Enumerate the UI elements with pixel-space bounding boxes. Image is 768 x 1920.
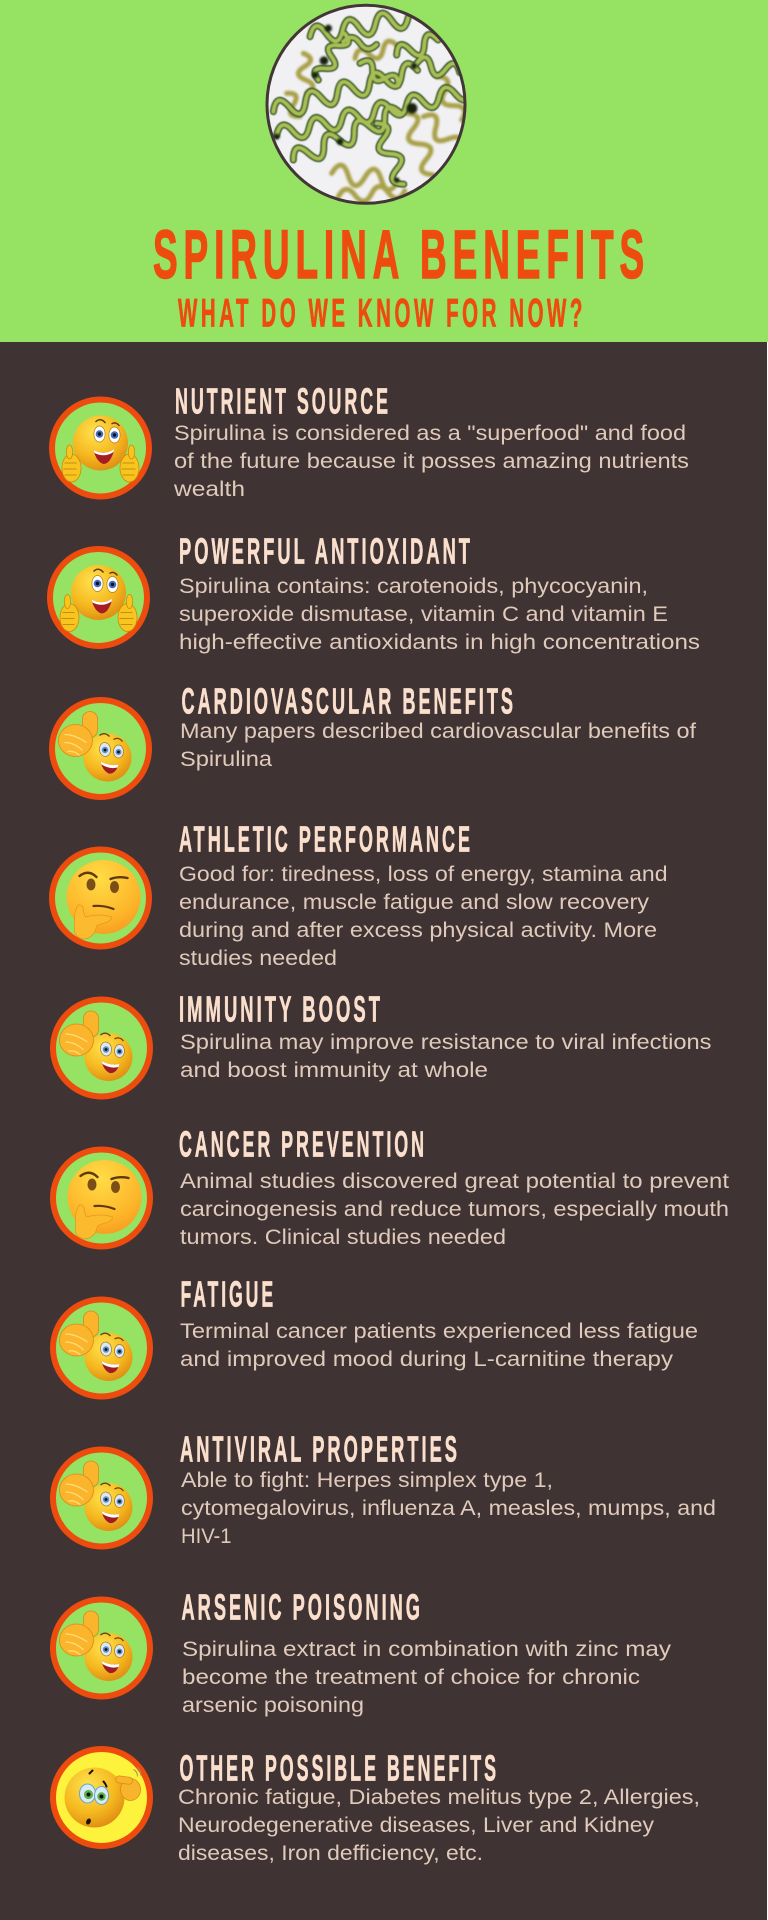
icon: thumb up emoji: [53, 1600, 150, 1696]
text block: [178, 1786, 700, 1865]
text block: [179, 575, 700, 654]
text block: Animal studies discovered great potential to prevent: [180, 1170, 729, 1193]
text block: endurance, muscle fatigue and slow recovery: [179, 891, 650, 914]
benefit: immunity boost: [53, 989, 712, 1096]
text block: [181, 1469, 716, 1548]
benefit: fatigue: [53, 1274, 698, 1396]
text block: Terminal cancer patients experienced less fatigue: [180, 1320, 698, 1343]
text block: [180, 1031, 712, 1082]
benefit: cancer prevention: [53, 1124, 729, 1249]
benefit: other possible benefits: [53, 1748, 700, 1865]
text block: cytomegalovirus, influenza A, measles, mumps, and: [181, 1497, 716, 1520]
heading: IMMUNITY BOOST: [179, 989, 383, 1030]
benefit: powerful antioxidant: [50, 531, 700, 654]
text block: [182, 1638, 672, 1717]
benefit: nutrient source: NUTRIENT SOURCE: [175, 381, 391, 422]
benefit: fatigue: FATIGUE: [180, 1274, 276, 1315]
text block: and boost immunity at whole: [180, 1059, 488, 1082]
icon: two thumbs up emoji: [52, 400, 149, 496]
text block: Able to fight: Herpes simplex type 1,: [181, 1469, 553, 1492]
benefit: athletic performance: ATHLETIC PERFORMANCE: [179, 819, 473, 860]
text block: of the future because it posses amazing nutrients: [174, 450, 689, 473]
text block: become the treatment of choice for chronic: [182, 1666, 640, 1689]
text block: HIV-1: [181, 1525, 232, 1548]
text block: Neurodegenerative diseases, Liver and Kidney: [178, 1814, 655, 1837]
text block: diseases, Iron defficiency, etc.: [178, 1842, 483, 1865]
text block: wealth: [173, 478, 245, 501]
text block: [179, 863, 668, 970]
text block: superoxide dismutase, vitamin C and vitamin E: [179, 603, 668, 626]
header: green banner: [0, 0, 768, 342]
text block: high-effective antioxidants in high concentrations: [179, 631, 700, 654]
icon: thumb up emoji: [53, 1000, 150, 1096]
text block: Spirulina is considered as a "superfood" and food: [174, 422, 686, 445]
text block: and improved mood during L-carnitine therapy: [180, 1348, 674, 1371]
text block: arsenic poisoning: [182, 1694, 364, 1717]
benefit: antiviral properties: [53, 1429, 716, 1548]
heading: POWERFUL ANTIOXIDANT: [179, 531, 473, 572]
icon: thumb up emoji: [53, 1450, 150, 1546]
spirulina microscope image: [267, 5, 473, 203]
text block: [180, 720, 696, 771]
icon: thinking emoji: [53, 1150, 150, 1246]
text block: tumors. Clinical studies needed: [180, 1226, 506, 1249]
text block: during and after excess physical activity. More: [179, 919, 657, 942]
text block: [180, 1170, 729, 1249]
text block: Spirulina contains: carotenoids, phycocyanin,: [179, 575, 648, 598]
icon: thumb up emoji: [52, 700, 149, 797]
text block: studies needed: [179, 947, 337, 970]
text block: [173, 422, 689, 501]
text block: Chronic fatigue, Diabetes melitus type 2, Allergies,: [178, 1786, 700, 1809]
icon: thinking emoji: [52, 850, 149, 946]
benefit: cancer prevention: CANCER PREVENTION: [179, 1124, 427, 1165]
text block: carcinogenesis and reduce tumors, especially mouth: [180, 1198, 729, 1221]
icon: two thumbs up emoji: [50, 549, 147, 646]
icon: confused emoji on yellow: [53, 1749, 150, 1846]
heading: ANTIVIRAL PROPERTIES: [180, 1429, 460, 1470]
benefit: nutrient source: [52, 381, 689, 501]
icon: thumb up emoji: [53, 1300, 150, 1396]
text block: [180, 1320, 698, 1371]
text block: Spirulina may improve resistance to viral infections: [180, 1031, 712, 1054]
benefit: cardiovascular benefits: [52, 681, 696, 797]
text block: Spirulina: [180, 748, 272, 771]
banner background: [0, 0, 768, 342]
text block: Many papers described cardiovascular benefits of: [180, 720, 696, 743]
text block: Good for: tiredness, loss of energy, stamina and: [179, 863, 668, 886]
benefit: arsenic poisoning: [53, 1587, 672, 1717]
text block: Spirulina extract in combination with zinc may: [182, 1638, 672, 1661]
benefit: athletic performance: [52, 819, 668, 970]
benefit: arsenic poisoning: ARSENIC POISONING: [182, 1587, 423, 1628]
